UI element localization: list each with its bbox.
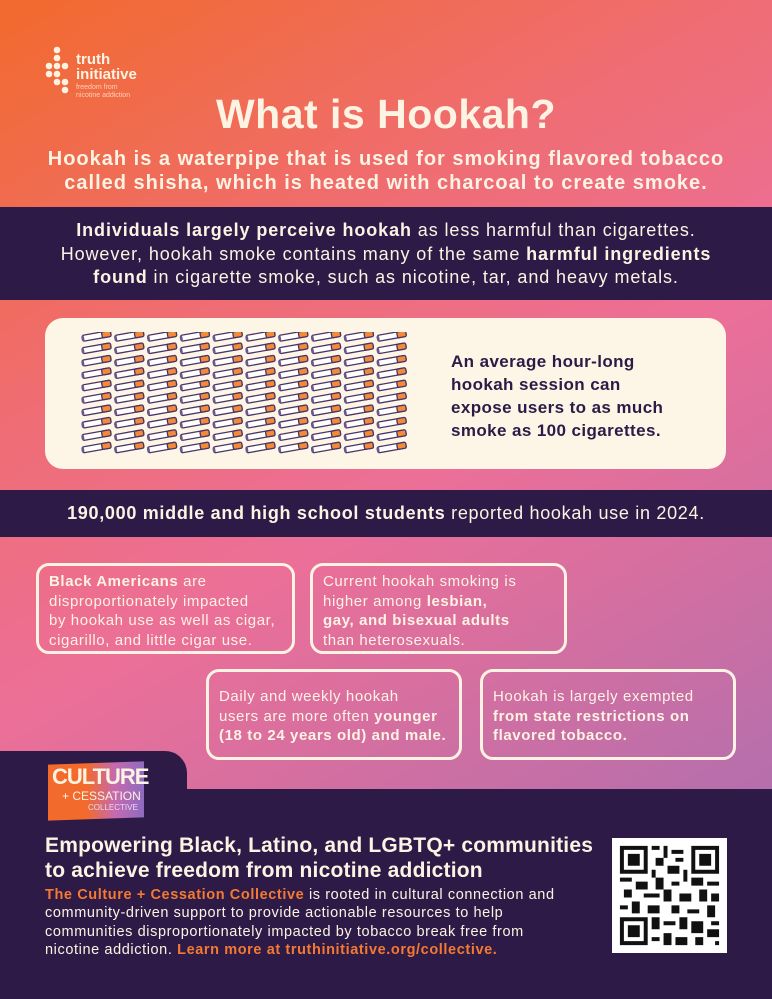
QR code	[612, 838, 727, 953]
logo: truth initiative: nicotine addiction	[76, 92, 130, 99]
chart: 100 cigarettes	[81, 332, 407, 454]
logo: Culture + Cessation Collective: CULTURE	[52, 764, 148, 789]
box: LGB adults	[310, 563, 567, 654]
heading: footer: Empowering Black, Latino, and LGBTQ+ communities	[45, 834, 593, 857]
title: What is Hookah?	[216, 91, 556, 137]
box: younger and male	[206, 669, 462, 760]
text: footer body: communities disproportionately impacted by tobacco break free from	[45, 924, 524, 940]
band: perception: found in cigarette smoke, such as nicotine, tar, and heavy metals.	[93, 267, 679, 287]
logo: truth initiative: truth	[76, 51, 110, 68]
logo: Culture + Cessation Collective: + CESSATION	[62, 789, 141, 803]
logo: Culture + Cessation Collective: COLLECTIVE	[88, 803, 138, 812]
text: session stat: An average hour-long	[451, 352, 635, 371]
heading: footer	[45, 834, 593, 882]
box: Black Americans: by hookah use as well as cigar,	[49, 612, 275, 629]
logo: truth initiative	[46, 46, 137, 99]
box: Black Americans: cigarillo, and little cigar use.	[49, 632, 252, 648]
box: younger and male: Daily and weekly hookah	[219, 688, 399, 705]
text: footer body: nicotine addiction. Learn more at truthinitiative.org/collective.	[45, 942, 497, 958]
box: flavored restrictions: Hookah is largely exempted	[493, 688, 694, 705]
subtitle	[48, 148, 724, 194]
box: Black Americans: Black Americans are	[49, 573, 207, 590]
panel: footer	[0, 751, 772, 999]
band: student stat: 190,000 middle and high school students reported hookah use in 2024.	[67, 503, 705, 523]
band: perception	[0, 207, 772, 300]
heading: footer: to achieve freedom from nicotine addiction	[45, 859, 483, 882]
logo: truth initiative: freedom from	[76, 84, 118, 91]
box: Black Americans: disproportionately impacted	[49, 592, 249, 610]
box: LGB adults: Current hookah smoking is	[323, 573, 516, 590]
box: LGB adults: gay, and bisexual adults	[323, 612, 510, 629]
box: younger and male: users are more often younger	[219, 708, 438, 724]
logo: Culture + Cessation Collective	[48, 761, 149, 821]
text: footer body: The Culture + Cessation Collective is rooted in cultural connection and	[45, 887, 555, 903]
subtitle: called shisha, which is heated with charcoal to create smoke.	[64, 172, 708, 194]
text: session stat: hookah session can	[451, 375, 621, 394]
logo: truth initiative: initiative	[76, 66, 137, 83]
box: younger and male: (18 to 24 years old) and male.	[219, 727, 446, 744]
box: flavored restrictions: from state restrictions on	[493, 708, 689, 724]
text: footer body: community-driven support to provide actionable resources to help	[45, 905, 503, 921]
box: flavored restrictions: flavored tobacco.	[493, 727, 627, 744]
box: Black Americans	[36, 563, 295, 654]
box: LGB adults: higher among lesbian,	[323, 592, 487, 610]
text: session stat	[451, 352, 663, 440]
band: perception: However, hookah smoke contains many of the same harmful ingredients	[61, 244, 711, 264]
panel: cigarettes comparison	[45, 318, 726, 469]
band: perception: Individuals largely perceive hookah as less harmful than cigarettes.	[76, 220, 696, 240]
text: session stat: expose users to as much	[451, 398, 663, 417]
box: LGB adults: than heterosexuals.	[323, 632, 465, 648]
text: footer body	[45, 887, 555, 958]
box: flavored restrictions	[480, 669, 736, 760]
text: session stat: smoke as 100 cigarettes.	[451, 421, 661, 440]
subtitle: Hookah is a waterpipe that is used for smoking flavored tobacco	[48, 148, 724, 170]
band: student stat	[0, 490, 772, 537]
